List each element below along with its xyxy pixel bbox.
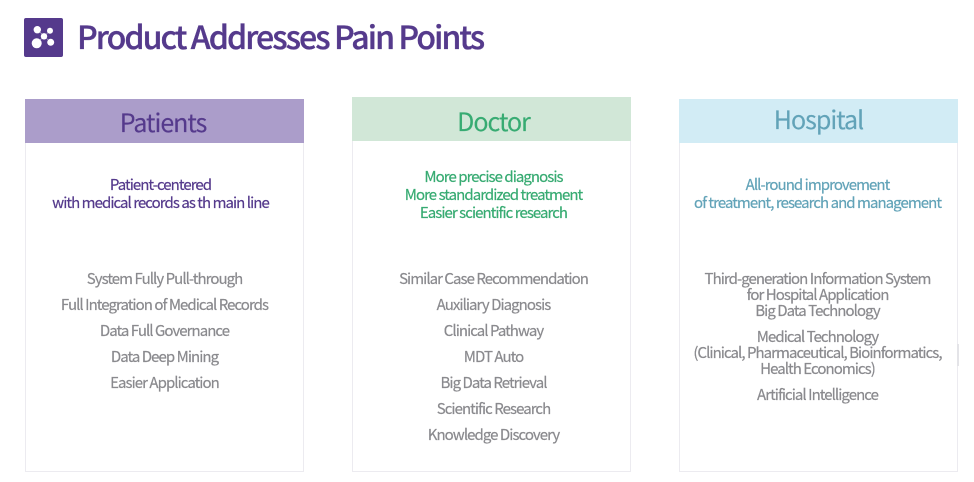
list: doctor items — [399, 268, 588, 445]
text: doctor summary: More standardized treatment — [405, 184, 582, 205]
panel: patients — [25, 99, 304, 472]
list: patients items: Data Deep Mining — [111, 346, 218, 367]
icon: product dots — [24, 18, 63, 57]
heading: hospital: Hospital — [774, 101, 863, 137]
text: patients summary: with medical records as th main line — [52, 192, 269, 213]
list: patients items: Full Integration of Medical Records — [61, 294, 268, 315]
list: medical technology: Health Economics) — [760, 358, 875, 379]
text: patients summary: Patient-centered — [110, 174, 211, 195]
list: patients items: Data Full Governance — [100, 320, 229, 341]
list: doctor items: Auxiliary Diagnosis — [437, 294, 550, 315]
panel: hospital — [679, 99, 958, 472]
list: doctor items: Clinical Pathway — [444, 320, 543, 341]
text: hospital summary: All-round improvement — [746, 174, 889, 195]
heading: hospital — [679, 99, 958, 143]
heading: patients — [25, 99, 304, 143]
list: medical technology: Medical Technology — [757, 326, 878, 347]
heading: doctor — [352, 97, 631, 141]
text: hospital summary: of treatment, research and management — [694, 192, 941, 213]
text: hospital summary — [694, 174, 942, 213]
list: doctor items: MDT Auto — [464, 346, 523, 367]
list: patients items — [61, 268, 268, 393]
list: doctor items: Big Data Retrieval — [440, 372, 547, 393]
list: medical technology — [693, 326, 942, 379]
list: hospital technology stack: for Hospital Application — [747, 284, 888, 305]
list: patients items: Easier Application — [110, 372, 219, 393]
list: artificial intelligence: Artificial Intelligence — [757, 384, 878, 405]
list: doctor items: Knowledge Discovery — [428, 424, 559, 445]
list: hospital technology stack — [704, 268, 930, 321]
list: patients items: System Fully Pull-through — [87, 268, 242, 289]
text: doctor summary: More precise diagnosis — [424, 166, 563, 187]
list: hospital technology stack: Big Data Technology — [755, 300, 880, 321]
heading: doctor: Doctor — [457, 103, 530, 139]
list: medical technology: (Clinical, Pharmaceutical, Bioinformatics, — [693, 342, 942, 363]
panel: doctor — [352, 97, 631, 472]
list: doctor items: Scientific Research — [437, 398, 550, 419]
text: doctor summary — [405, 166, 583, 223]
text: patients summary — [52, 174, 270, 213]
heading: patients: Patients — [120, 104, 206, 140]
list: hospital technology stack: Third-generation Information System — [705, 268, 930, 289]
title: Product Addresses Pain Points — [77, 13, 483, 59]
text: doctor summary: Easier scientific research — [420, 202, 567, 223]
list: doctor items: Similar Case Recommendation — [399, 268, 588, 289]
